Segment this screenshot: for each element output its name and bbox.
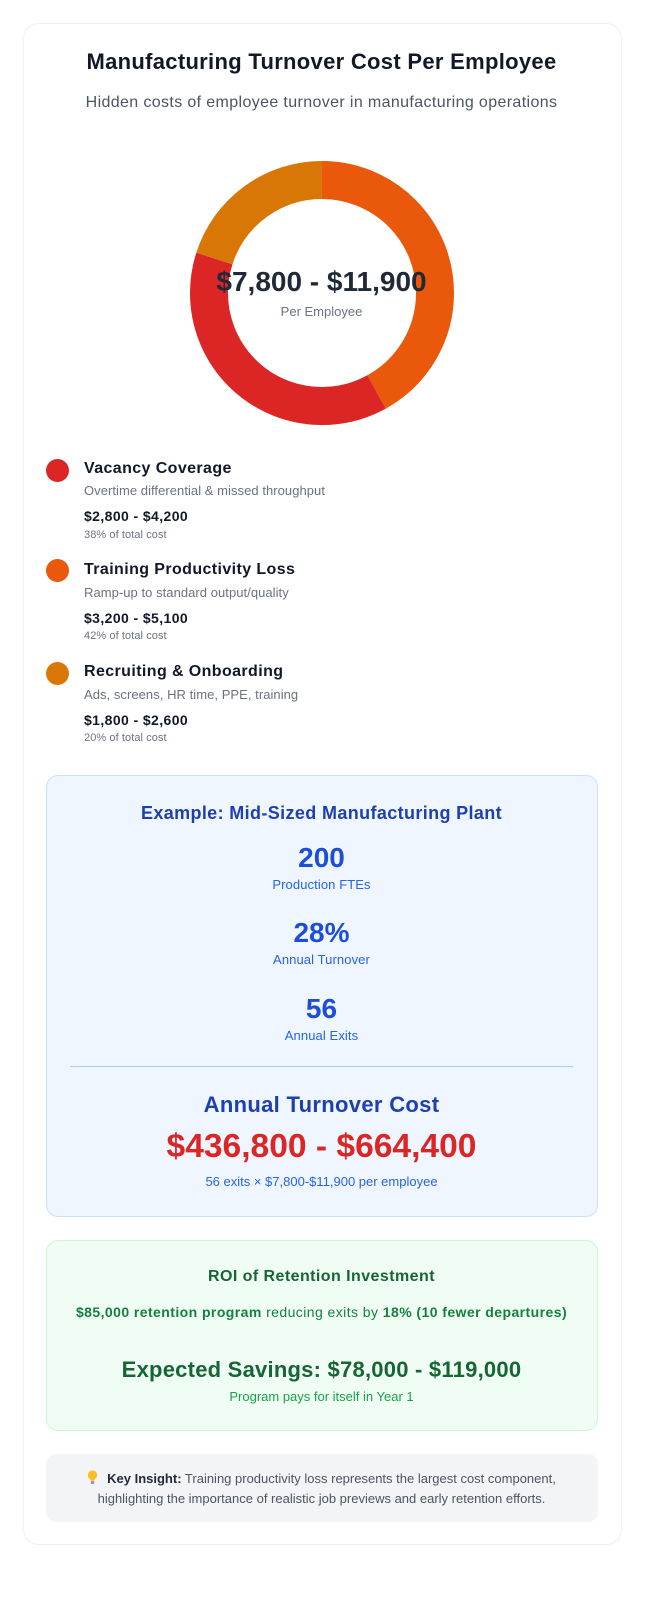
annual cost formula: 56 exits × $7,800-$11,900 per employee <box>205 1174 438 1189</box>
panel: ROI <box>46 1240 598 1431</box>
legend: vacancy coverage: 38% of total cost <box>84 529 167 541</box>
legend: vacancy coverage: Vacancy Coverage <box>84 460 232 477</box>
panel: example plant <box>46 775 598 1217</box>
ROI description: $85,000 retention program reducing exits by 18% (10 fewer departures) <box>76 1304 567 1320</box>
legend: training productivity loss <box>46 559 295 642</box>
stat: annual turnover <box>273 917 370 967</box>
legend: training productivity loss: $3,200 - $5,100 <box>84 610 188 626</box>
legend: recruiting and onboarding: 20% of total cost <box>84 732 167 744</box>
key insight text <box>88 1470 556 1506</box>
legend: recruiting and onboarding: Ads, screens, HR time, PPE, training <box>84 687 298 702</box>
key insight text: highlighting the importance of realistic job previews and early retention efforts. <box>98 1491 545 1506</box>
stat: production FTEs: Production FTEs <box>272 877 371 892</box>
ROI heading: ROI of Retention Investment <box>208 1268 435 1285</box>
legend: vacancy coverage: Overtime differential & missed throughput <box>84 483 325 498</box>
annual cost value: $436,800 - $664,400 <box>167 1128 476 1165</box>
expected savings: Expected Savings: $78,000 - $119,000 <box>122 1357 521 1382</box>
icon: light bulb <box>88 1470 98 1484</box>
legend: recruiting and onboarding: $1,800 - $2,600 <box>84 712 188 728</box>
legend: vacancy coverage: $2,800 - $4,200 <box>84 508 188 524</box>
legend: training productivity loss: Ramp-up to standard output/quality <box>84 585 289 600</box>
stat: annual turnover: 28% <box>293 917 350 948</box>
legend: recruiting and onboarding <box>46 662 298 744</box>
stat: annual turnover: Annual Turnover <box>273 952 370 967</box>
stat: production FTEs: 200 <box>298 842 345 873</box>
legend: training productivity loss: Training Productivity Loss <box>84 561 295 578</box>
legend: recruiting and onboarding: Recruiting & Onboarding <box>84 663 283 680</box>
legend: vacancy coverage <box>46 459 325 541</box>
stat: production FTEs <box>272 842 371 892</box>
stat: annual exits <box>284 993 358 1043</box>
donut chart <box>190 161 454 425</box>
legend: training productivity loss: 42% of total cost <box>84 630 167 642</box>
title: Manufacturing Turnover Cost Per Employee <box>86 49 556 74</box>
key insight text: Key Insight: Training productivity loss represents the largest cost component, <box>107 1471 556 1486</box>
annual cost heading: Annual Turnover Cost <box>204 1092 439 1117</box>
payback note: Program pays for itself in Year 1 <box>229 1389 414 1404</box>
subtitle: Hidden costs of employee turnover in manufacturing operations <box>86 94 557 111</box>
donut center value: $7,800 - $11,900 <box>216 266 427 297</box>
panel: key insight <box>46 1454 598 1522</box>
stat: annual exits: 56 <box>306 993 337 1024</box>
example heading: Example: Mid-Sized Manufacturing Plant <box>141 803 502 823</box>
donut center label: Per Employee <box>281 304 362 319</box>
stat: annual exits: Annual Exits <box>285 1028 358 1043</box>
